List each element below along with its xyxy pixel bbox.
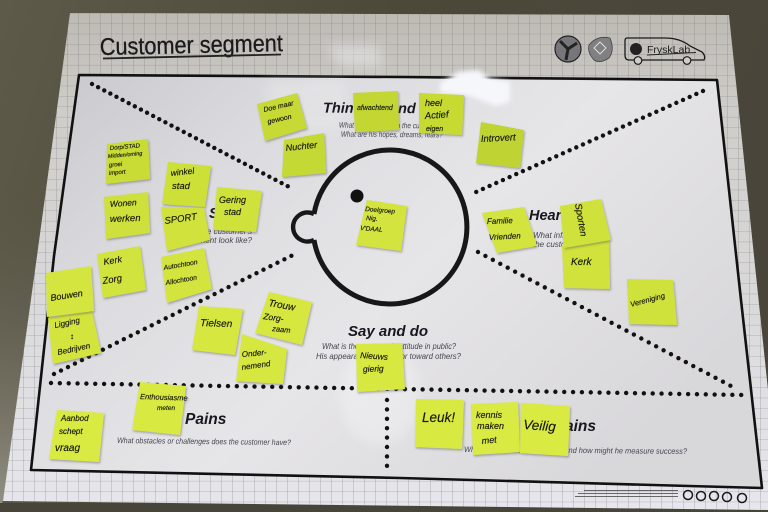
sticky: doe gewoon xyxy=(257,93,307,141)
title: Customer segment xyxy=(100,30,283,61)
sticky: sporten xyxy=(560,199,611,248)
sticky: heel actief eigen: eigen xyxy=(426,126,443,133)
sticky: wonen werken xyxy=(104,192,150,239)
licence icons xyxy=(684,490,746,502)
sticky: tieleen xyxy=(192,306,243,355)
sticky: gering stad: stad xyxy=(224,207,242,217)
section: pains xyxy=(117,411,292,447)
sticky: kennis maken met: maken xyxy=(477,421,504,431)
sticky: enthousiasme: Enthousiasme xyxy=(140,392,188,403)
section: say and do: What is the customer's attitude in public? xyxy=(322,342,457,351)
sticky: leuk xyxy=(415,399,464,449)
sticky: familie vrienden: Vrienden xyxy=(489,231,521,242)
sticky: enthousiasme xyxy=(132,382,188,435)
sticky: veilig xyxy=(520,403,570,456)
sticky: wonen werken: Wonen xyxy=(109,197,137,209)
sticky: kennis maken met: met xyxy=(481,434,498,446)
section: gains: What does the customer want and how might he measure success? xyxy=(464,445,688,456)
reflections on the laminate xyxy=(265,45,420,445)
sticky: vereniging xyxy=(627,279,677,325)
sticky: heel actief eigen: heel xyxy=(425,98,443,108)
sticky: trouw zorgzaam xyxy=(255,292,312,345)
sticky: bouwen: Bouwen xyxy=(50,288,83,303)
sticky: familie vrienden xyxy=(482,207,537,253)
sticky: doelgroep xyxy=(356,200,407,251)
sticky: dorp stad: groei xyxy=(109,162,123,169)
dotted segment dividers xyxy=(51,84,742,467)
sticky: doelgroep: V'DAAL xyxy=(360,225,383,234)
sticky: nuchter: Nuchter xyxy=(285,140,319,153)
sticky: wonen werken: werken xyxy=(110,213,141,225)
sticky: nieuwsgierig xyxy=(356,343,405,392)
sticky: nuchter xyxy=(282,133,326,177)
sticky: dorp stad xyxy=(106,139,150,184)
section: think and feel: What matters most to the customer? xyxy=(339,121,443,130)
sticky: trouw zorgzaam: Zorg- xyxy=(262,311,284,324)
sticky: dorp stad: Midden/omlng xyxy=(108,151,144,160)
sticky: aanbod schept vraag xyxy=(49,410,104,462)
icon: FryskLab van xyxy=(625,38,705,64)
sticky: ligging bedrijven: ↕ xyxy=(70,332,74,341)
sticky: bouwen xyxy=(46,266,94,317)
sticky: vereniging: Vereniging xyxy=(629,291,667,309)
section: think and feel: Think a xyxy=(323,101,374,117)
sticky: kerk xyxy=(562,240,610,289)
sticky: tieleen: Tielsen xyxy=(200,318,233,330)
icon: FryskLab van: FryskLab xyxy=(647,44,690,56)
sticky: afwachtend: afwachtend xyxy=(357,105,394,112)
icon: round logo xyxy=(555,36,581,62)
sticky: introvert: Introvert xyxy=(481,132,516,145)
sticky: ondernemend: Onder- xyxy=(241,348,267,359)
sticky notes xyxy=(46,91,677,462)
sticky: aanbod schept vraag: Aanbod xyxy=(60,414,89,423)
licence footer xyxy=(575,490,746,502)
sticky: gering stad: Gering xyxy=(219,195,246,205)
sticky: veilig: Veilig xyxy=(523,417,557,434)
icon: shield logo xyxy=(589,37,612,62)
sticky: winkel stad xyxy=(162,162,211,207)
sticky: doelgroep: Doelgroep xyxy=(365,206,396,216)
sticky: aanbod schept vraag: vraag xyxy=(55,443,80,454)
section: think and feel: What are his hopes, dreams, fears? xyxy=(341,130,443,139)
section: see: See xyxy=(209,206,235,222)
head illustration xyxy=(293,150,467,304)
sticky: trouw zorgzaam: Trouw xyxy=(267,298,297,314)
sticky: kerk zorg: Kerk xyxy=(103,254,123,267)
section: think and feel xyxy=(323,101,454,139)
section: see xyxy=(172,206,253,245)
sticky: heel actief eigen xyxy=(419,93,464,135)
sticky: doelgroep: Nig. xyxy=(366,215,378,223)
sticky: doe gewoon: Doe maar xyxy=(263,100,295,114)
sticky: afwachtend xyxy=(353,91,399,132)
sticky: kennis maken met xyxy=(471,402,520,455)
sticky: familie vrienden: Familie xyxy=(487,216,513,226)
section: gains xyxy=(464,418,688,456)
section: pains: What obstacles or challenges does the customer have? xyxy=(117,436,292,447)
sticky: ligging bedrijven: Bedrijven xyxy=(57,341,92,357)
section: gains: Gains xyxy=(553,418,596,435)
sticky: nieuwsgierig: Nieuws xyxy=(360,350,389,362)
sticky: trouw zorgzaam: zaam xyxy=(271,324,291,335)
partner logos xyxy=(555,36,705,64)
sticky: nieuwsgierig: gierig xyxy=(363,363,384,374)
sticky: winkel stad: winkel xyxy=(170,165,196,178)
sticky: ligging bedrijven: Ligging xyxy=(54,316,81,330)
licence small print xyxy=(575,490,678,497)
sticky: doe gewoon: gewoon xyxy=(267,114,292,126)
sticky: ligging bedrijven xyxy=(48,311,101,364)
section: say and do xyxy=(316,323,462,361)
section: say and do: His appearance? Behavior toward others? xyxy=(316,352,462,361)
sticky: dorp stad: import xyxy=(109,170,126,177)
sticky: kennis maken met: kennis xyxy=(476,410,503,420)
sticky: kerk zorg xyxy=(97,246,146,298)
sticky: introvert xyxy=(476,122,524,168)
sticky: aanbod schept vraag: schept xyxy=(59,427,83,436)
sticky: ondernemend xyxy=(236,334,287,384)
main canvas frame xyxy=(31,75,762,488)
sticky: enthousiasme: meten xyxy=(157,405,175,412)
sticky: sporten: Sporten xyxy=(572,203,589,237)
sticky: sport xyxy=(161,207,210,251)
sticky: heel actief eigen: Actief xyxy=(423,109,450,122)
sticky: leuk: Leuk! xyxy=(422,410,455,425)
sticky: autochtoon allochtoon: Autochtoon xyxy=(162,259,198,272)
sticky: autochtoon allochtoon: Allochtoon xyxy=(164,275,198,287)
section: think and feel: nd feel? xyxy=(398,101,454,117)
section: hear: the customer? xyxy=(533,240,584,249)
section: hear: What influences the xyxy=(533,231,604,240)
sticky: gering stad xyxy=(213,187,262,232)
sticky: kerk zorg: Zorg xyxy=(101,273,123,287)
sticky: kerk: Kerk xyxy=(571,257,593,268)
sticky: ondernemend: nemend xyxy=(241,359,271,372)
sticky: sport: SPORT xyxy=(164,211,199,227)
section: hear: Hear xyxy=(529,208,563,224)
sticky: dorp stad: Dorp/STAD xyxy=(110,143,141,152)
section: see: environment look like? xyxy=(172,236,253,245)
sticky: autochtoon allochtoon xyxy=(161,248,212,303)
section: see: the customer's xyxy=(200,227,252,236)
section: hear xyxy=(529,208,604,249)
sticky: winkel stad: stad xyxy=(172,181,191,192)
section: say and do: Say and do xyxy=(348,323,428,340)
bright glare xyxy=(440,70,510,106)
section: pains: Pains xyxy=(185,411,227,428)
